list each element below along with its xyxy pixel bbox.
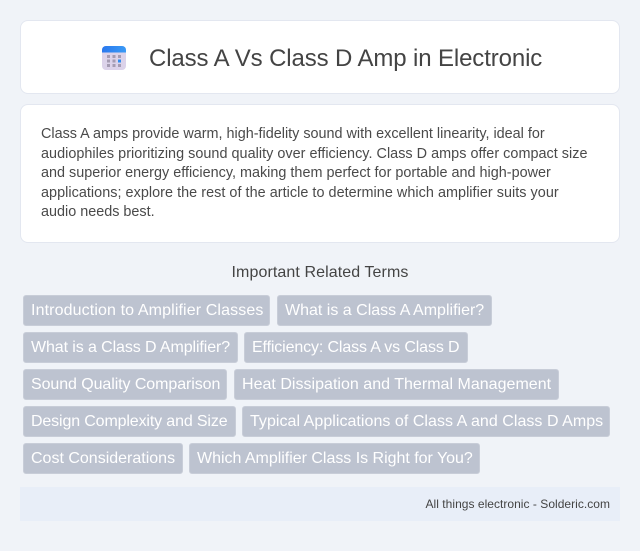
tag — [234, 369, 559, 400]
summary text — [41, 126, 588, 220]
tag: Which Amplifier Class Is Right for You? — [197, 450, 473, 467]
related term tags — [23, 295, 610, 474]
tag: Typical Applications of Class A and Class D Amps — [250, 413, 603, 430]
tag: Cost Considerations — [31, 450, 175, 467]
header panel — [20, 20, 620, 94]
title: Class A Vs Class D Amp in Electronic — [149, 45, 542, 72]
footer bar — [20, 487, 620, 521]
tag: What is a Class D Amplifier? — [31, 339, 230, 356]
tag — [277, 295, 492, 326]
tag — [23, 332, 238, 363]
tag — [189, 443, 480, 474]
summary text: Class A amps provide warm, high-fidelity sound with excellent linearity, ideal for — [41, 126, 545, 142]
tag: Design Complexity and Size — [31, 413, 227, 430]
tag: Introduction to Amplifier Classes — [31, 302, 264, 319]
tag: Sound Quality Comparison — [31, 376, 220, 393]
summary text: and superior energy efficiency, making them perfect for portable and high-power — [41, 165, 551, 181]
tag: Efficiency: Class A vs Class D — [252, 339, 459, 356]
related terms heading: Important Related Terms — [232, 264, 408, 281]
summary text: applications; explore the rest of the article to determine which amplifier suits your — [41, 184, 559, 200]
tag — [23, 295, 270, 326]
tag: What is a Class A Amplifier? — [285, 302, 484, 319]
tag — [23, 443, 183, 474]
summary text: audio needs best. — [41, 204, 155, 220]
summary panel — [20, 104, 620, 243]
tag — [23, 369, 227, 400]
footer text: All things electronic - Solderic.com — [426, 497, 610, 511]
tag — [242, 406, 610, 437]
tag — [23, 406, 236, 437]
summary text: audiophiles prioritizing sound quality over efficiency. Class D amps offer compact size — [41, 146, 588, 162]
tag — [244, 332, 468, 363]
icon: calendar — [102, 46, 126, 70]
tag: Heat Dissipation and Thermal Management — [242, 376, 551, 393]
